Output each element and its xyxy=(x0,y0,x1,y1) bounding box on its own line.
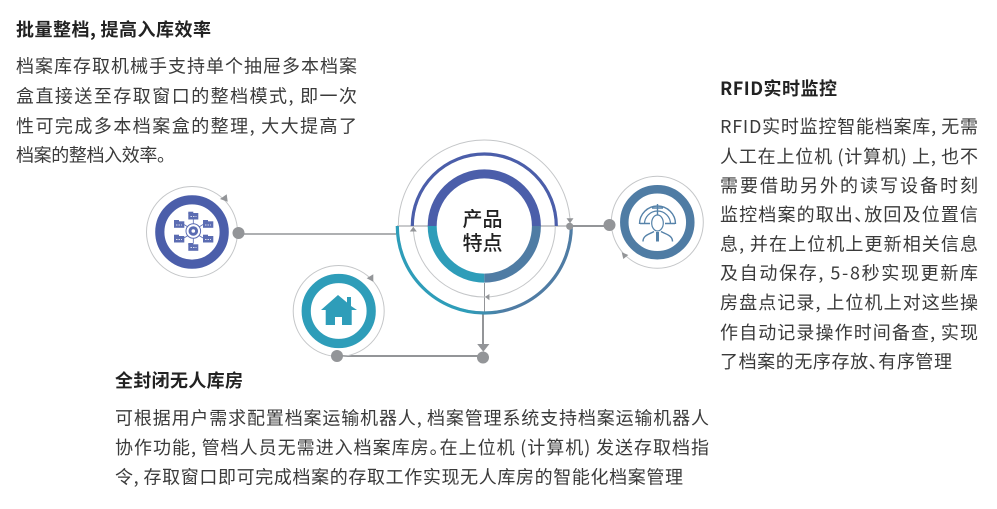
connector arrow and nodes xyxy=(477,223,573,364)
body: unmanned warehouse xyxy=(115,404,709,490)
text block: RFID monitoring xyxy=(720,75,978,374)
body: unmanned warehouse: 令, 存取窗口即可完成档案的存取工作实现无人库房的智能化档案管理 xyxy=(115,464,683,490)
node: batch filing icon xyxy=(146,186,244,278)
text block: batch filing xyxy=(16,16,357,168)
body: RFID monitoring xyxy=(720,113,978,374)
body: RFID monitoring: 作自动记录操作时间备查, 实现 xyxy=(720,319,978,345)
body: RFID monitoring: 监控档案的取出、放回及位置信 xyxy=(720,201,978,227)
body: batch filing: 盒直接送至存取窗口的整档模式, 即一次 xyxy=(16,82,357,108)
body: RFID monitoring: 房盘点记录, 上位机上对这些操 xyxy=(720,289,978,315)
heading: batch filing: 批量整档, 提高入库效率 xyxy=(16,16,211,42)
body: batch filing xyxy=(16,52,357,168)
body: batch filing: 性可完成多本档案盒的整理, 大大提高了 xyxy=(16,112,357,138)
small arrowheads on central rings xyxy=(410,218,574,300)
node: unmanned warehouse icon xyxy=(293,266,384,362)
body: unmanned warehouse: 可根据用户需求配置档案运输机器人, 档案管理系统支持档案运输机器人 xyxy=(115,404,709,430)
central label xyxy=(462,203,502,256)
body: RFID monitoring: 息, 并在上位机上更新相关信息 xyxy=(720,230,978,256)
icon: house xyxy=(321,295,357,325)
text block: unmanned warehouse xyxy=(115,367,709,490)
body: unmanned warehouse: 协作功能, 管档人员无需进入档案库房。在上位机 (计算机) 发送存取档指 xyxy=(115,434,709,460)
icon: folders around gear xyxy=(174,212,213,251)
heading: unmanned warehouse: 全封闭无人库房 xyxy=(115,367,243,393)
central product feature circle xyxy=(397,140,574,313)
icon: person in target xyxy=(640,204,676,242)
node: RFID monitoring icon xyxy=(604,176,703,268)
body: batch filing: 档案的整档入效率。 xyxy=(16,142,175,168)
connector lines xyxy=(238,226,610,356)
body: batch filing: 档案库存取机械手支持单个抽屉多本档案 xyxy=(16,52,357,78)
body: RFID monitoring: 及自动保存, 5-8秒实现更新库 xyxy=(720,260,978,286)
central label: 产品 xyxy=(462,203,502,232)
body: RFID monitoring: RFID实时监控智能档案库, 无需 xyxy=(720,113,978,139)
body: RFID monitoring: 人工在上位机 (计算机) 上, 也不 xyxy=(720,143,978,169)
heading: RFID monitoring: RFID实时监控 xyxy=(720,75,837,101)
central label: 特点 xyxy=(462,227,502,256)
body: RFID monitoring: 了档案的无序存放、有序管理 xyxy=(720,348,952,374)
body: RFID monitoring: 需要借助另外的读写设备时刻 xyxy=(720,172,978,198)
